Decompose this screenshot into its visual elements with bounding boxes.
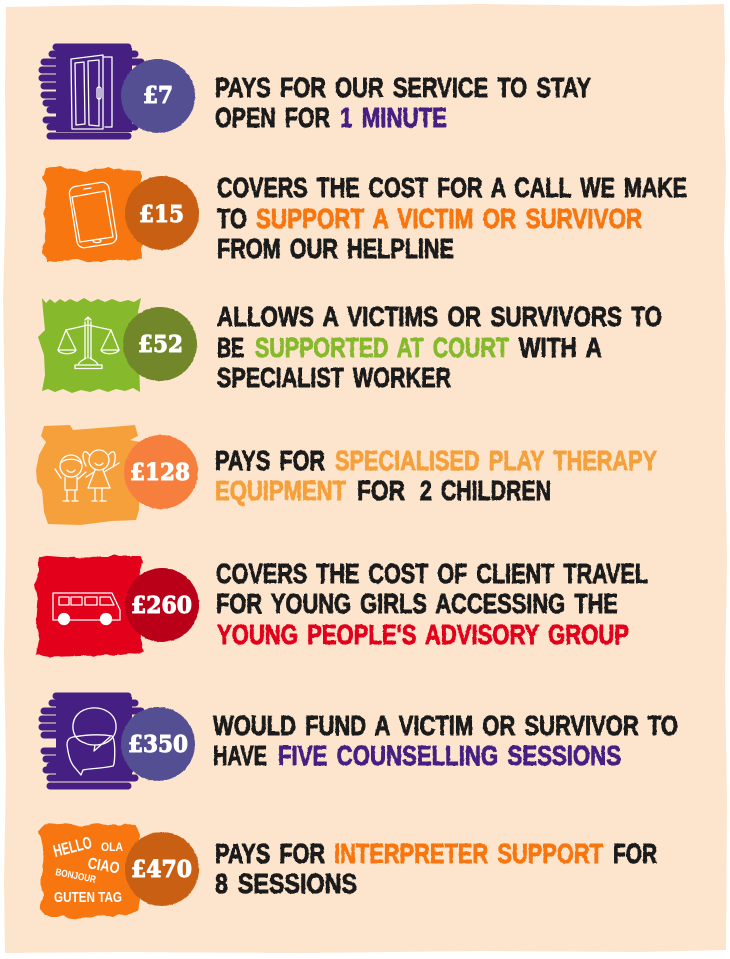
text: £350 description: FIVE COUNSELLING SESSIONS	[278, 740, 621, 771]
text: £52 description: WITH A	[519, 332, 602, 363]
text: £15 description: FROM OUR HELPLINE	[217, 233, 454, 264]
price badge: £128	[124, 435, 198, 509]
row 4: £128 play therapy	[36, 425, 657, 525]
row 3: £52 court support	[38, 298, 662, 393]
text: £15 description: SUPPORT A VICTIM OR SURVIVOR	[256, 203, 642, 234]
price badge: £260: £260	[131, 592, 192, 619]
text: £350 description: HAVE	[213, 740, 267, 771]
price badge: £15: £15	[139, 201, 184, 228]
brush blob: red	[35, 556, 143, 657]
text: £52 description	[217, 301, 662, 393]
price badge: £7: £7	[143, 82, 173, 109]
text: £260 description: FOR YOUNG GIRLS ACCESSING THE	[216, 588, 618, 619]
text: £350 description	[213, 710, 678, 771]
text: £15 description: TO	[217, 203, 247, 234]
icon: speech bubbles	[67, 708, 116, 775]
text: £470 description	[215, 838, 657, 899]
brush blob: purple	[42, 47, 141, 136]
text: £15 description	[217, 172, 687, 264]
text: £470 description: INTERPRETER SUPPORT	[334, 838, 603, 869]
price badge: £15	[125, 176, 199, 250]
icon: door	[71, 55, 112, 129]
row 2: £15 helpline call	[42, 167, 687, 264]
brush blob: green	[38, 298, 141, 393]
price badge: £470: £470	[131, 856, 192, 883]
text: £260 description	[216, 558, 648, 650]
text: £128 description	[215, 445, 657, 506]
row 5: £260 client travel	[35, 556, 648, 657]
text: £128 description: PAYS FOR	[215, 445, 325, 476]
text: £52 description: SPECIALIST WORKER	[217, 362, 451, 393]
row 7: £470 interpreter	[39, 823, 657, 919]
text: £128 description: EQUIPMENT	[215, 475, 346, 506]
brush blob: light orange	[36, 425, 140, 525]
text: £7 description: PAYS FOR OUR SERVICE TO STAY	[215, 72, 591, 103]
text: £470 description: PAYS FOR	[215, 838, 325, 869]
icon: greetings in many languages: BONJOUR	[54, 867, 97, 886]
icon: greetings in many languages: CIAO	[86, 855, 121, 877]
icon: greetings in many languages	[51, 833, 123, 906]
price badge: £470	[125, 832, 199, 906]
text: £128 description: 2 CHILDREN	[420, 475, 551, 506]
price badge: £350: £350	[128, 731, 188, 758]
price badge: £128: £128	[130, 459, 190, 486]
icon: greetings in many languages: OLA	[101, 840, 123, 854]
icon: greetings in many languages: HELLO	[51, 833, 94, 861]
text: £7 description	[215, 72, 591, 133]
row 6: £350 counselling	[42, 696, 678, 786]
icon: greetings in many languages: GUTEN TAG	[54, 889, 122, 906]
price badge: £350	[121, 707, 195, 781]
icon: mobile phone	[68, 181, 118, 249]
price badge: £52: £52	[138, 331, 183, 358]
text: £52 description: SUPPORTED AT COURT	[255, 332, 509, 363]
icon: scales of justice	[58, 317, 119, 368]
icon: bus	[53, 593, 120, 624]
price badge: £52	[123, 307, 197, 381]
text: £470 description: 8 SESSIONS	[215, 868, 357, 899]
text: £260 description: YOUNG PEOPLE'S ADVISORY GROUP	[217, 619, 629, 650]
text: £470 description: FOR	[613, 838, 657, 869]
text: £7 description: OPEN FOR	[215, 102, 330, 133]
text: £128 description: FOR	[357, 475, 405, 506]
icon: two children	[55, 450, 119, 501]
brush blob: orange	[39, 823, 140, 919]
price badge: £7	[121, 59, 195, 133]
row 1: £7 service open	[42, 47, 591, 136]
brush blob: purple	[42, 696, 141, 786]
text: £7 description: 1 MINUTE	[340, 102, 447, 133]
brush blob: orange	[42, 167, 143, 262]
text: £52 description: BE	[217, 332, 244, 363]
price badge: £260	[125, 568, 199, 642]
